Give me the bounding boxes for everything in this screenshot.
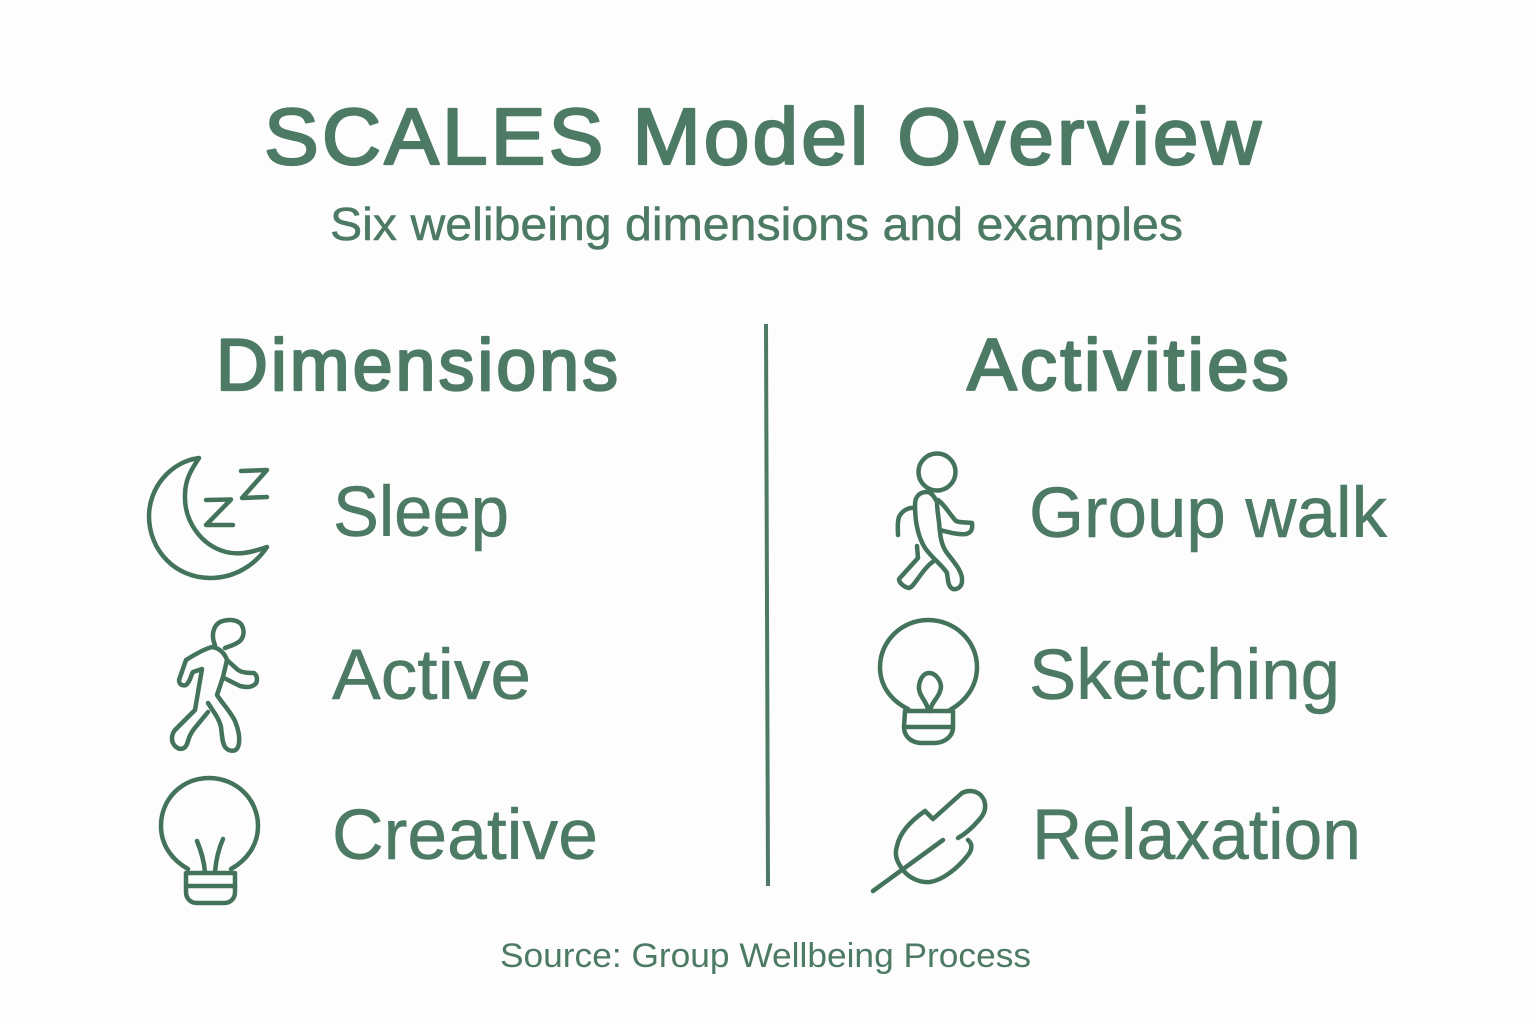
panel: activities xyxy=(873,325,1387,891)
icon: running person xyxy=(172,620,257,751)
heading: dimensions: Dimensions xyxy=(216,325,621,406)
column divider xyxy=(766,324,768,886)
icon: light bulb xyxy=(161,778,258,903)
title: SCALES Model Overview xyxy=(264,92,1264,181)
panel: dimensions xyxy=(149,325,621,903)
icon: light bulb with flame xyxy=(880,620,977,743)
source note: Source: Group Wellbeing Process xyxy=(500,937,1031,975)
icon: walking person xyxy=(898,454,972,589)
label: group walk: Group walk xyxy=(1029,474,1387,553)
subtitle: Six welibeing dimensions and examples xyxy=(330,198,1183,250)
label: creative: Creative xyxy=(332,796,598,875)
heading: activities: Activities xyxy=(967,325,1292,406)
label: sleep: Sleep xyxy=(333,473,509,552)
icon: feather xyxy=(873,791,985,891)
label: active: Active xyxy=(332,636,531,715)
label: sketching: Sketching xyxy=(1029,636,1340,715)
icon: moon with z's xyxy=(149,458,267,578)
label: relaxation: Relaxation xyxy=(1032,796,1361,875)
